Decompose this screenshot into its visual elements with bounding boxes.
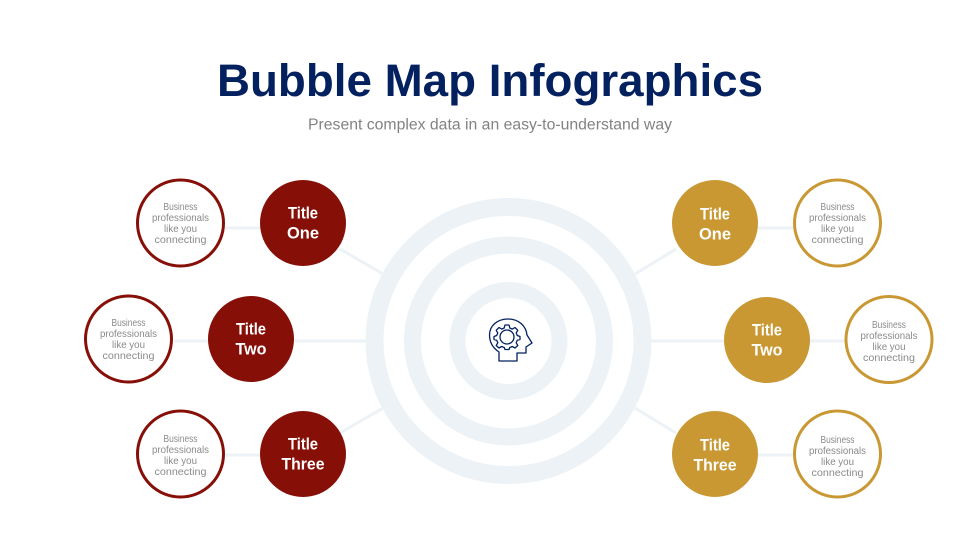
left detail: Three: professionals <box>152 444 209 456</box>
right bubble: Title Three: Title <box>700 436 730 454</box>
right detail: Two: Business <box>872 319 906 331</box>
icon: head with gear <box>490 319 532 361</box>
title: Bubble Map Infographics <box>217 55 763 106</box>
left bubble: Title Three <box>260 411 346 497</box>
left detail: Two: like you <box>112 339 145 351</box>
left detail: Two: professionals <box>100 328 157 340</box>
left bubble: Title Two: Two <box>236 340 266 358</box>
left detail: Two: connecting <box>102 350 155 362</box>
left detail: Three <box>138 411 224 497</box>
right detail: One: Business <box>820 201 854 213</box>
left detail: Two: Business <box>112 317 146 329</box>
right bubble: Title Two: Two <box>752 340 782 360</box>
right detail: Three: connecting <box>812 467 864 479</box>
left bubble: Title Three: Three <box>282 454 324 474</box>
left detail: Three: Business <box>164 433 198 445</box>
right detail: Three: Business <box>820 434 854 446</box>
right detail: Three: like you <box>821 456 854 468</box>
left detail: Two <box>86 296 172 382</box>
subtitle: Present complex data in an easy-to-understand way <box>308 116 672 134</box>
left detail: One: connecting <box>154 234 207 246</box>
right detail: Three <box>794 411 880 497</box>
left detail: Three: connecting <box>154 466 207 478</box>
right detail: One: professionals <box>809 212 866 224</box>
left detail: Three: like you <box>164 455 197 467</box>
concentric rings <box>374 207 642 475</box>
right bubble: Title One: Title <box>700 204 730 224</box>
right detail: One: connecting <box>812 234 864 246</box>
right detail: Two: professionals <box>860 330 918 342</box>
left bubble: Title Two: Title <box>236 320 266 338</box>
left detail: One: like you <box>164 223 197 235</box>
right detail: Two <box>846 296 932 382</box>
right detail: Three: professionals <box>809 445 866 457</box>
right bubble: Title Two: Title <box>752 320 782 340</box>
right detail: Two: connecting <box>863 352 915 364</box>
right detail: One: like you <box>821 223 854 235</box>
right bubble: Title Three: Three <box>694 456 736 474</box>
left detail: One <box>138 180 224 266</box>
left detail: One: professionals <box>152 212 209 224</box>
connector lines <box>174 228 846 455</box>
left bubble: Title One: Title <box>288 204 318 222</box>
right bubble: Title Two <box>724 297 810 383</box>
left bubble: Title Two <box>208 296 294 382</box>
right bubble: Title One <box>672 180 758 266</box>
left detail: One: Business <box>164 201 198 213</box>
right detail: Two: like you <box>872 341 906 353</box>
right bubble: Title Three <box>672 411 758 497</box>
left bubble: Title One: One <box>287 224 319 242</box>
right bubble: Title One: One <box>699 224 731 244</box>
right detail: One <box>794 180 880 266</box>
left bubble: Title One <box>260 180 346 266</box>
left bubble: Title Three: Title <box>288 434 318 454</box>
